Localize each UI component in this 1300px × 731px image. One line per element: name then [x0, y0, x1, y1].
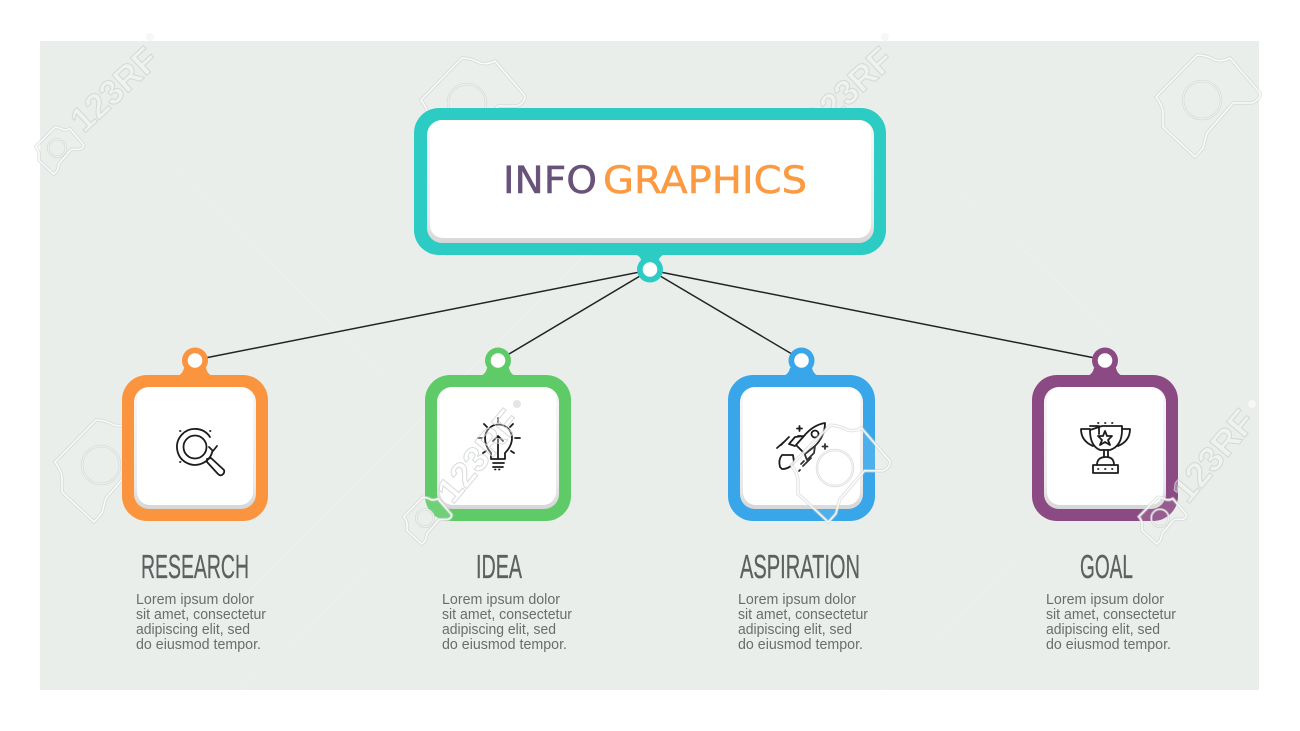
text block: idea: sit amet, consectetur [442, 607, 572, 623]
icon: rocket [777, 423, 828, 471]
heading: GRAPHICS [603, 159, 807, 202]
purple frame with ring [1032, 348, 1178, 521]
text block: idea [442, 592, 572, 653]
icon: trophy [1081, 423, 1130, 473]
green frame with ring [425, 348, 571, 521]
panel: infographics title box [414, 108, 886, 282]
teal hub connector [632, 254, 668, 282]
title card face [430, 120, 871, 238]
heading: idea: IDEA [476, 548, 522, 585]
card face [740, 387, 863, 509]
text block: research: Lorem ipsum dolor [136, 592, 254, 608]
text block: goal: Lorem ipsum dolor [1046, 592, 1164, 608]
title card shadow [427, 120, 874, 243]
text block: goal: do eiusmod tempor. [1046, 637, 1171, 653]
panel: idea card [425, 348, 572, 653]
text block: goal: adipiscing elit, sed [1046, 622, 1160, 638]
heading: research: RESEARCH [141, 548, 249, 585]
watermark marks: 123RF [63, 40, 166, 140]
watermark marks over cards: 123RF [1164, 402, 1264, 510]
panel: research card [122, 348, 268, 653]
heading: goal: GOAL [1080, 548, 1133, 585]
text block: idea: Lorem ipsum dolor [442, 592, 560, 608]
watermark marks: 123RF [798, 40, 901, 140]
card face [1044, 387, 1166, 509]
text block: aspiration: do eiusmod tempor. [738, 637, 863, 653]
blue frame with ring [728, 348, 875, 521]
text block: aspiration [738, 592, 868, 653]
panel: goal card [1032, 348, 1178, 653]
icon: light bulb with arrow [478, 418, 520, 470]
heading: INFO [503, 159, 597, 202]
text block: research: do eiusmod tempor. [136, 637, 261, 653]
text block: research [136, 592, 266, 653]
teal frame [414, 108, 886, 255]
text block: aspiration: Lorem ipsum dolor [738, 592, 856, 608]
icon: magnifier with arrow [177, 429, 224, 475]
text block: aspiration: adipiscing elit, sed [738, 622, 852, 638]
heading: aspiration: ASPIRATION [740, 548, 860, 585]
card face [437, 387, 559, 509]
watermark marks over cards [404, 400, 1264, 544]
watermark marks over cards: 123RF [429, 402, 529, 510]
orange frame with ring [122, 348, 268, 521]
card face [134, 387, 256, 509]
text block: idea: adipiscing elit, sed [442, 622, 556, 638]
text block: research: adipiscing elit, sed [136, 622, 250, 638]
text block: goal: sit amet, consectetur [1046, 607, 1176, 623]
text block: research: sit amet, consectetur [136, 607, 266, 623]
text block: goal [1046, 592, 1176, 653]
text block: aspiration: sit amet, consectetur [738, 607, 868, 623]
text block: idea: do eiusmod tempor. [442, 637, 567, 653]
panel: aspiration card [728, 348, 875, 653]
connector lines [195, 270, 1105, 360]
